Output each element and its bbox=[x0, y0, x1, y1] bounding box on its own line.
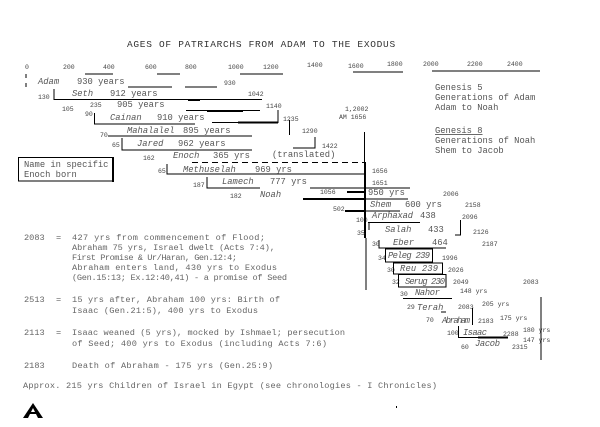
Lamech row: 1651 bbox=[372, 180, 388, 187]
timeline axis: 600 bbox=[145, 64, 157, 71]
Serug row: Serug 230 bbox=[405, 277, 445, 287]
vertical flood line bbox=[364, 162, 366, 238]
Nahor row: 148 yrs bbox=[460, 288, 487, 295]
note: Isaac weaned bbox=[24, 328, 345, 349]
icon: publisher logo bbox=[23, 403, 43, 418]
Genesis 5 note: Generations of Adam bbox=[435, 93, 535, 103]
Adam row: Adam bbox=[37, 77, 60, 87]
Isaac row: Isaac bbox=[463, 328, 487, 338]
note: Isaac weaned: of Seed; 400 yrs to Exodus (including Acts 7:6) bbox=[72, 339, 327, 349]
timeline axis: 2200 bbox=[467, 61, 483, 68]
Reu row bbox=[387, 263, 464, 274]
Peleg row: Peleg 239 bbox=[388, 251, 430, 261]
Abraham row: 175 yrs bbox=[500, 315, 527, 322]
Jared row: 1422 bbox=[322, 143, 338, 150]
Abraham row: Abraham bbox=[441, 316, 471, 326]
Serug row: 2049 bbox=[453, 279, 469, 286]
Abraham row: 70 bbox=[426, 317, 434, 324]
Shem row: 502 bbox=[333, 206, 345, 213]
Adam row bbox=[37, 77, 236, 87]
note: 2083: = bbox=[56, 233, 61, 243]
timeline axis: 1000 bbox=[228, 64, 244, 71]
Genesis 11 note: Genesis 8 bbox=[435, 126, 483, 136]
note: Isaac weaned: = bbox=[56, 328, 61, 338]
Noah row bbox=[230, 188, 459, 200]
Reu row: 2026 bbox=[448, 267, 464, 274]
Noah row: Noah bbox=[260, 190, 281, 200]
Genesis 5 note: Adam to Noah bbox=[435, 103, 498, 113]
note: Isaac weaned: Isaac weaned (5 yrs), mocked by Ishmael; persecution bbox=[72, 328, 345, 338]
Serug row bbox=[392, 274, 539, 287]
timeline axis: 0 bbox=[25, 64, 29, 71]
Enoch row: 162 bbox=[143, 155, 155, 162]
Isaac row: 2288 bbox=[503, 331, 519, 338]
Terah row: 29 bbox=[407, 304, 415, 311]
Jacob row: Jacob bbox=[475, 339, 500, 349]
timeline axis: 2000 bbox=[423, 61, 439, 68]
Arphaxad row: 438 bbox=[420, 211, 436, 221]
Enoch row: (translated) bbox=[272, 150, 335, 160]
Enoch row: Enoch bbox=[173, 151, 199, 161]
Salah row: 433 bbox=[428, 225, 444, 235]
Enos row: 905 years bbox=[117, 100, 165, 110]
Terah row: 2083 bbox=[458, 304, 474, 311]
timeline axis: 2400 bbox=[507, 61, 523, 68]
Peleg row: 34 bbox=[378, 255, 386, 262]
timeline axis: 1800 bbox=[387, 61, 403, 68]
timeline axis: 800 bbox=[185, 64, 197, 71]
Abraham row bbox=[426, 308, 527, 326]
Cainan row: 90 bbox=[85, 111, 93, 118]
Arphaxad row: 100 bbox=[356, 217, 368, 224]
Enoch row: 365 yrs bbox=[213, 151, 250, 161]
Arphaxad row: 2096 bbox=[462, 214, 478, 221]
Shem row: Shem bbox=[370, 200, 392, 210]
Cainan row: Cainan bbox=[110, 113, 142, 123]
Seth row: 912 years bbox=[110, 89, 158, 99]
date labels bbox=[339, 106, 369, 121]
Seth row bbox=[38, 89, 264, 101]
Jacob row bbox=[461, 337, 550, 351]
Eber row: 30 bbox=[372, 241, 380, 248]
exodus date line bbox=[540, 297, 542, 360]
Enos row: 1140 bbox=[266, 103, 282, 110]
Salah row bbox=[357, 220, 489, 237]
note: 430 years bbox=[24, 295, 280, 316]
Methuselah row: 969 yrs bbox=[255, 165, 292, 175]
Methuselah row: Methuselah bbox=[183, 165, 236, 175]
Isaac row: 180 yrs bbox=[523, 327, 550, 334]
Cainan row: 1235 bbox=[283, 116, 299, 123]
Methuselah row: 65 bbox=[158, 168, 166, 175]
Jacob row: 147 yrs bbox=[523, 337, 550, 344]
Isaac row bbox=[447, 326, 550, 338]
Jared row bbox=[112, 137, 338, 150]
Mahalalel row: 70 bbox=[100, 132, 108, 139]
Noah row: 950 yrs bbox=[368, 188, 405, 198]
Serug row: 2083 bbox=[523, 279, 539, 286]
Noah row: 2006 bbox=[443, 191, 459, 198]
Eber row: Eber bbox=[393, 238, 414, 248]
timeline axis: 1200 bbox=[263, 64, 279, 71]
Genesis 11 note bbox=[435, 126, 535, 156]
Adam row: 930 bbox=[224, 80, 236, 87]
Noah row: 182 bbox=[230, 193, 242, 200]
note box bbox=[18, 157, 113, 182]
title: AGES OF PATRIARCHS FROM ADAM TO THE EXODUS bbox=[127, 39, 396, 50]
Shem row: 2158 bbox=[465, 202, 481, 209]
note: 430 years: = bbox=[56, 295, 61, 305]
note: 2083: (Gen.15:13; Ex.12:40,41) - a promise of Seed bbox=[72, 273, 287, 283]
Nahor row: 30 bbox=[400, 291, 408, 298]
note: 2083: 427 yrs from commencement of Flood; bbox=[72, 233, 265, 243]
Arphaxad row bbox=[356, 211, 478, 224]
Jared row: 65 bbox=[112, 142, 120, 149]
timeline axis bbox=[25, 61, 540, 87]
note box: Name in specific bbox=[24, 160, 108, 170]
Genesis 11 note: Generations of Noah bbox=[435, 136, 535, 146]
Terah row: Terah bbox=[417, 303, 443, 313]
Seth row: 1042 bbox=[248, 91, 264, 98]
Nahor row: Nahor bbox=[415, 288, 440, 298]
Noah row: 1056 bbox=[320, 189, 336, 196]
Salah row: Salah bbox=[385, 225, 411, 235]
Jacob row: 60 bbox=[461, 344, 469, 351]
note: children of Israel: Approx. 215 yrs Children of Israel in Egypt (see chronologies - I Chronicles) bbox=[23, 381, 437, 391]
Methuselah row bbox=[158, 164, 388, 175]
Enos row: 235 bbox=[90, 102, 102, 109]
Seth row: 130 bbox=[38, 94, 50, 101]
Lamech row bbox=[193, 177, 410, 189]
note: 2083: 2083 bbox=[24, 233, 45, 243]
note: 2083: First Promise & Ur/Haran, Gen.12:4; bbox=[72, 253, 237, 263]
Isaac row: 100 bbox=[447, 330, 459, 337]
note: Death of Abraham: Death of Abraham - 175 yrs (Gen.25:9) bbox=[72, 361, 273, 371]
Shem row: 600 yrs bbox=[405, 200, 442, 210]
Cainan row: 910 years bbox=[157, 113, 205, 123]
Salah row: 35 bbox=[357, 230, 365, 237]
Genesis 5 note: Genesis 5 bbox=[435, 83, 483, 93]
Serug row: 32 bbox=[392, 279, 400, 286]
note: 430 years: 2513 bbox=[24, 295, 45, 305]
Lamech row: 777 yrs bbox=[270, 177, 307, 187]
Genesis 11 note: Shem to Jacob bbox=[435, 146, 504, 156]
note: Death of Abraham: 2183 bbox=[24, 361, 45, 371]
Lamech row: 187 bbox=[193, 182, 205, 189]
timeline axis: 400 bbox=[103, 64, 115, 71]
timeline axis: 200 bbox=[63, 64, 75, 71]
Lamech row: Lamech bbox=[222, 177, 254, 187]
Reu row: 30 bbox=[387, 267, 395, 274]
Seth row: Seth bbox=[72, 89, 93, 99]
Genesis 5 note bbox=[435, 83, 535, 113]
Peleg row bbox=[378, 249, 458, 262]
note: 2083 bbox=[24, 233, 287, 283]
note: 430 years: Isaac (Gen.21:5), 400 yrs to Exodus bbox=[72, 306, 258, 316]
Arphaxad row: Arphaxad bbox=[371, 211, 414, 221]
note: 2083: Abraham enters land, 430 yrs to Exodus bbox=[72, 263, 277, 273]
note: Isaac weaned: 2113 bbox=[24, 328, 45, 338]
Eber row bbox=[372, 238, 498, 248]
Terah row: 205 yrs bbox=[482, 301, 509, 308]
Methuselah row: 1656 bbox=[372, 168, 388, 175]
Jared row: 962 years bbox=[178, 139, 226, 149]
Enos row: 105 bbox=[62, 106, 74, 113]
Reu row: Reu 239 bbox=[400, 264, 438, 274]
Jared row: Jared bbox=[137, 139, 164, 149]
note: 430 years: 15 yrs after, Abraham 100 yrs: Birth of bbox=[72, 295, 280, 305]
Enos row bbox=[62, 100, 282, 113]
Jacob row: 2315 bbox=[512, 344, 528, 351]
date labels: AM 1656 bbox=[339, 114, 366, 121]
note box: Enoch born bbox=[24, 170, 77, 180]
Terah row bbox=[407, 301, 509, 313]
Peleg row: 1996 bbox=[442, 255, 458, 262]
date labels: 1,2002 bbox=[345, 106, 369, 113]
timeline axis: 1600 bbox=[348, 63, 364, 70]
Shem row bbox=[333, 200, 481, 213]
Adam row: 930 years bbox=[77, 77, 125, 87]
Cainan row bbox=[85, 110, 299, 124]
Mahalalel row: Mahalalel bbox=[127, 126, 175, 136]
Mahalalel row: 1290 bbox=[302, 128, 318, 135]
Eber row: 464 bbox=[432, 238, 448, 248]
speck bbox=[396, 406, 397, 408]
note: 2083: Abraham 75 yrs, Israel dwelt (Acts 7:4), bbox=[72, 243, 275, 253]
Mahalalel row: 895 years bbox=[183, 126, 231, 136]
timeline axis: 1400 bbox=[307, 62, 323, 69]
Enoch row bbox=[143, 150, 365, 162]
Eber row: 2187 bbox=[482, 241, 498, 248]
Abraham row: 2183 bbox=[478, 318, 494, 325]
Nahor row bbox=[400, 288, 487, 298]
Mahalalel row bbox=[100, 120, 318, 139]
Salah row: 2126 bbox=[473, 229, 489, 236]
